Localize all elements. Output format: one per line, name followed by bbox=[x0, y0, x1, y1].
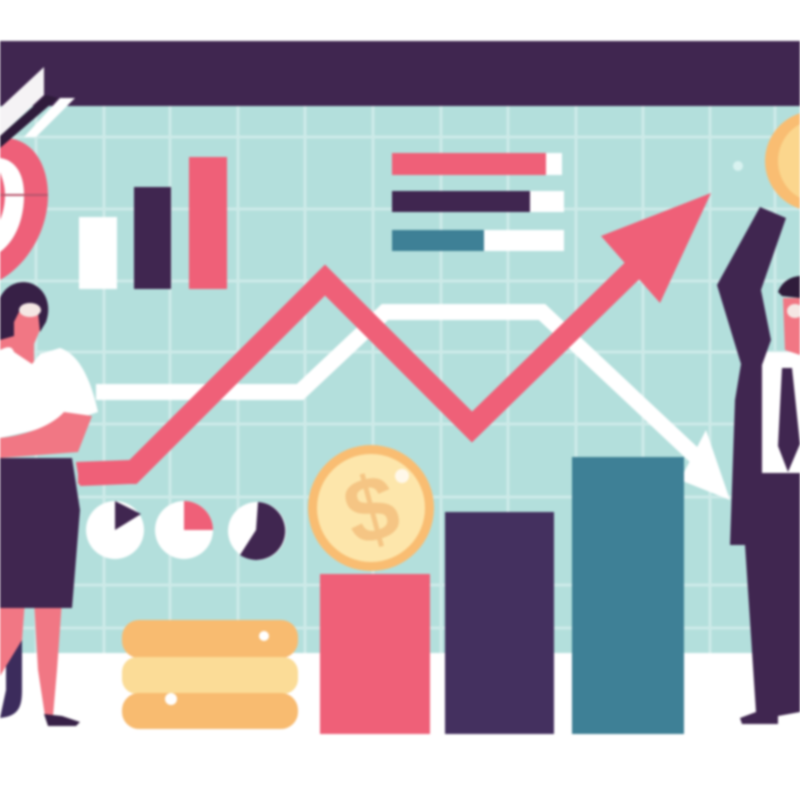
gold coin held bbox=[733, 111, 800, 211]
bar chart: small top bars bbox=[79, 157, 227, 289]
figure: woman bbox=[0, 282, 130, 726]
pie charts bbox=[86, 501, 286, 560]
coin stack bbox=[122, 620, 298, 729]
pink rising arrow bbox=[78, 193, 711, 473]
large bars bbox=[320, 457, 684, 734]
progress bars bbox=[392, 153, 564, 251]
panel: teal grid board bbox=[0, 105, 800, 653]
icon: target with arrow bbox=[0, 67, 75, 280]
white declining arrow line bbox=[96, 312, 730, 500]
icon: dollar coin: $ bbox=[334, 454, 409, 566]
figure: man in suit bbox=[717, 207, 800, 724]
icon: dollar coin bbox=[308, 445, 434, 571]
header bar bbox=[0, 41, 800, 106]
